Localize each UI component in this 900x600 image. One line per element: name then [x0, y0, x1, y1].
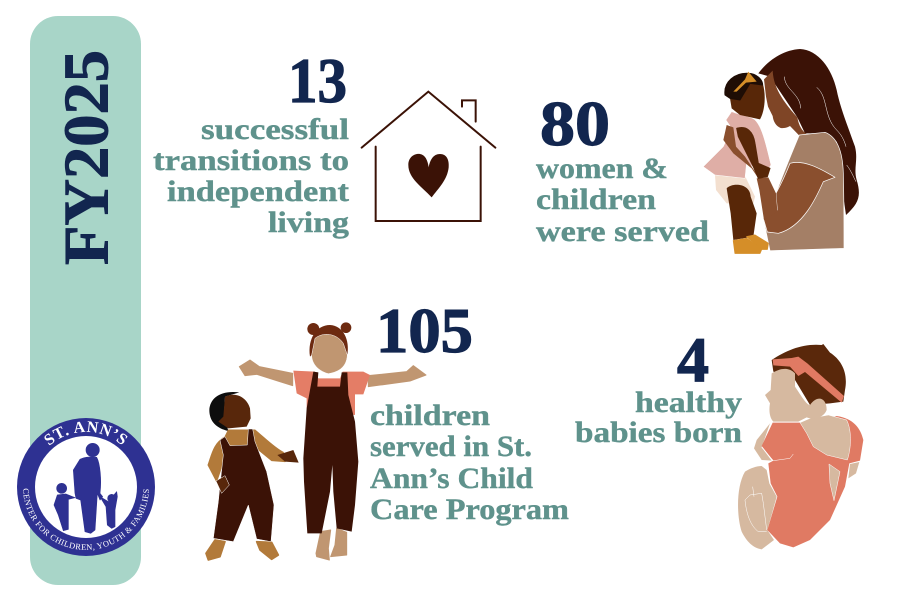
stat: 13 transitions: independent: [167, 175, 349, 208]
stat: 80 women and children: were served: [536, 215, 709, 248]
logo: St. Ann's: ST. ANN’S: [44, 421, 128, 446]
stat: 4 babies: babies born: [575, 416, 742, 449]
stat: 80 women and children: women &: [536, 152, 668, 185]
stat: 13 transitions: successful: [201, 113, 349, 146]
boy: [206, 392, 299, 560]
stat: 13 transitions: [153, 45, 349, 239]
stat: 4 babies: healthy: [635, 386, 742, 419]
illustration: mother and baby: [703, 49, 859, 253]
illustration: two children in overalls: [206, 322, 426, 560]
logo: St. Ann's: [17, 418, 155, 556]
stat: 105 children: children: [370, 399, 490, 432]
stat: 105 children: [370, 295, 569, 526]
stat: 80 women and children: children: [536, 183, 656, 216]
stat: 13 transitions: 13: [288, 45, 347, 116]
stat: 80 women and children: 80: [540, 88, 610, 159]
illustration: baby with headband: [738, 344, 863, 549]
stat: 80 women and children: [536, 88, 709, 248]
stat: 4 babies: [575, 324, 742, 449]
stat: 105 children: 105: [376, 295, 473, 366]
stat: 4 babies: 4: [677, 324, 709, 395]
stat: 105 children: served in St.: [370, 430, 532, 463]
panel: FY2025 sidebar: [30, 16, 141, 585]
stat: 13 transitions: transitions to: [153, 144, 349, 177]
stat: 105 children: Ann’s Child: [370, 462, 533, 495]
girl: [239, 322, 426, 560]
heading: FY2025: FY2025: [50, 50, 122, 265]
icon: house with heart: [362, 92, 495, 221]
stat: 105 children: Care Program: [370, 493, 569, 526]
logo: St. Ann's: CENTER FOR CHILDREN, YOUTH & FAMILIES: [23, 488, 149, 551]
stat: 13 transitions: living: [268, 206, 349, 239]
